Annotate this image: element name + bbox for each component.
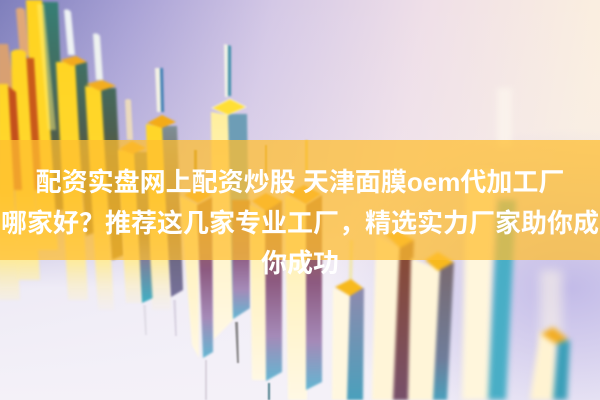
headline text: 你成功 — [261, 248, 339, 278]
bars: lower descending columns — [180, 185, 322, 400]
bars: rear left cluster — [0, 0, 124, 310]
translucent amber title band — [0, 140, 600, 260]
bars: center upper — [118, 44, 250, 340]
thin needle marks — [143, 140, 308, 400]
headline text: 哪家好？推荐这几家专业工厂，精选实力厂家助你成 — [1, 208, 599, 238]
headline text: 配资实盘网上配资炒股 天津面膜oem代加工厂 — [36, 167, 564, 197]
soft light streaks — [497, 88, 562, 340]
bars: lower right columns — [332, 170, 570, 400]
